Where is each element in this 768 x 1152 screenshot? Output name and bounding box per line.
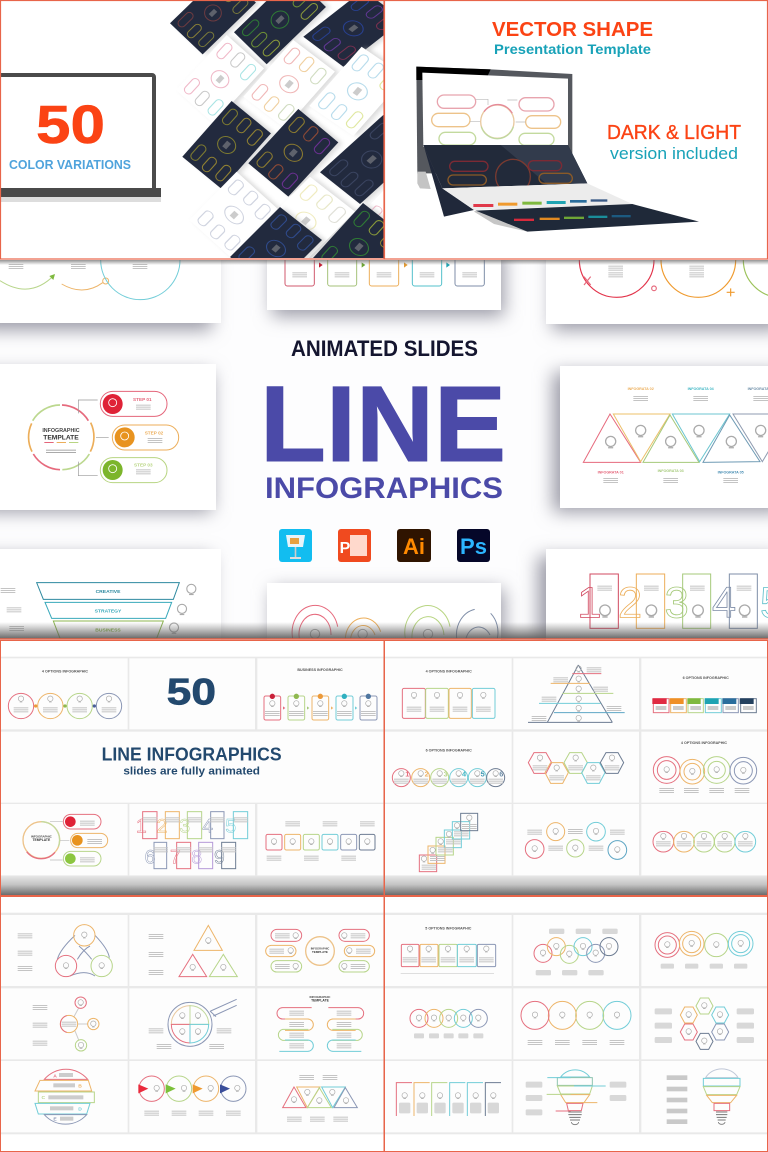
slide: 6 options tabs [652, 676, 756, 713]
slide: six pills around circle: TEMPLATE [312, 950, 328, 954]
slide: light bulb with arrows [526, 1070, 626, 1125]
slide cards: diagonal color variation thumbnails [170, 1, 384, 258]
slide: numbered 1 to 9: 5 [225, 817, 236, 838]
card: step list infographic: INFOGRAPHIC [42, 428, 80, 434]
subheading: version included: version included [610, 144, 738, 163]
panel: main cover [0, 260, 768, 640]
slide: six pills around circle: INFOGRAPHIC [311, 947, 329, 951]
slide: circle bands A to E: E [53, 1117, 57, 1123]
label: color variations: COLOR VARIATIONS [9, 158, 131, 172]
card: top right circles [546, 260, 768, 324]
slide: business infographic: BUSINESS INFOGRAPHIC [297, 668, 343, 672]
card: numbered infographic: 3 [665, 579, 689, 627]
slide: magnifier quadrants [149, 999, 237, 1049]
card: step list infographic: STEP 02 [145, 431, 164, 436]
number: 50: 50 [167, 671, 216, 713]
panel: bulbs and sequence grid [384, 896, 768, 1152]
slide: squares with labels [266, 821, 375, 861]
icon: powerpoint: P [340, 540, 351, 557]
heading: dark and light: DARK & LIGHT [607, 122, 741, 144]
slide: 6 numbered circles: 4 [462, 770, 467, 779]
slide: six flag columns [396, 1083, 501, 1116]
card: top center boxes [267, 260, 501, 310]
card shadows [0, 250, 768, 649]
slide: six pills around circle [266, 929, 375, 972]
slide: infographic template steps: TEMPLATE [32, 838, 51, 842]
slide: 4 options boxes: 4 OPTIONS INFOGRAPHIC [426, 670, 472, 674]
bottom shadow [0, 876, 384, 895]
slide: numbered 1 to 9: 6 [145, 847, 155, 868]
icon: adobe photoshop: Ps [460, 534, 487, 559]
slide: 4 options circles: 4 OPTIONS INFOGRAPHIC [42, 670, 88, 674]
icon: powerpoint [338, 529, 371, 562]
card: numbered infographic: 1 [577, 579, 601, 627]
slide: infographic template steps: INFOGRAPHIC [31, 834, 53, 838]
card: step list infographic: TEMPLATE [43, 434, 79, 441]
slide: 5 options boxes [401, 926, 496, 974]
slide: four circles with flags [138, 1076, 246, 1116]
heading: line infographics: LINE INFOGRAPHICS [102, 744, 282, 765]
laptop [0, 75, 161, 202]
slide: pyramid [528, 665, 625, 722]
slide: infographic template steps [23, 814, 108, 866]
slide: 6 numbered circles: 6 OPTIONS INFOGRAPHIC [426, 748, 472, 752]
card: funnel infographic [0, 549, 221, 640]
slide: light bulb with text list [667, 1069, 740, 1124]
card: numbered infographic [546, 549, 768, 640]
title: infographics: INFOGRAPHICS [265, 472, 503, 505]
slide: four large circles [521, 1001, 631, 1045]
slide: 4 options circles [8, 670, 122, 719]
icon: adobe illustrator [397, 529, 431, 562]
slide: 5 connected circles [653, 831, 756, 852]
slide: 4 options boxes [402, 670, 495, 718]
slide: numbered 1 to 9: 9 [214, 847, 225, 868]
number 50: 50 [36, 95, 105, 155]
slide: circle bands A to E: C [42, 1095, 46, 1101]
slide: 4 option spirals: 4 OPTIONS INFOGRAPHIC [681, 741, 727, 745]
slide: template mirrored pills: TEMPLATE [311, 999, 330, 1003]
slide: 6 numbered circles: 1 [405, 770, 409, 779]
card: triangles infographic: INFOGRATA 05 [718, 470, 744, 474]
card: numbered infographic: 4 [712, 579, 736, 627]
slide: three triangles [149, 925, 237, 977]
panel: vector shape presentation template [384, 0, 768, 259]
slide: 4 option spirals [653, 741, 757, 793]
card: top left arcs [0, 259, 221, 323]
subheading: presentation template: Presentation Template [494, 41, 651, 57]
slide: circle bands A to E [35, 1069, 94, 1124]
slide: wave circles [525, 822, 627, 859]
slide: numbered 1 to 9: 8 [191, 847, 202, 868]
slide: four spiral circles [655, 931, 753, 969]
slide: three linked circles [18, 925, 112, 977]
slide: stair squares [419, 813, 478, 872]
card: triangles infographic [560, 366, 768, 508]
card: step list infographic: STEP 01 [133, 397, 152, 402]
slide: numbered 1 to 9: 3 [179, 817, 190, 838]
icon: adobe photoshop [457, 529, 490, 562]
panel: 50 line infographics grid [0, 640, 384, 896]
slide: template mirrored pills: INFOGRAPHIC [310, 995, 331, 999]
card: step list infographic: STEP 03 [134, 462, 153, 467]
slide: circle bands A to E: B [78, 1084, 82, 1090]
slide: numbered 1 to 9: 7 [170, 847, 181, 868]
panel: 50 color variations [1, 1, 384, 258]
panel: shapes grid [0, 896, 384, 1152]
slide: circle bands A to E: A [53, 1073, 57, 1079]
card: triangles infographic: INFOGRATA 02 [628, 387, 654, 391]
monitor with slides [416, 67, 699, 232]
card: bottom center spirals [267, 583, 501, 640]
bottom shadow [384, 876, 768, 895]
slide: numbered 1 to 9: 4 [202, 817, 213, 838]
card: numbered infographic: 2 [618, 579, 642, 627]
subheading: slides are fully animated: slides are fully animated [123, 765, 260, 777]
panel: options grid [384, 640, 768, 896]
slide: hexagon ring [655, 998, 754, 1049]
card: triangles infographic: INFOGRATA 03 [658, 469, 684, 473]
card: funnel infographic: CREATIVE [96, 589, 121, 595]
slide: zigzag circles [534, 929, 618, 975]
slide: 5 options boxes: 5 OPTIONS INFOGRAPHIC [425, 926, 472, 930]
slide: template mirrored pills [277, 995, 364, 1051]
slide: 6 numbered circles [392, 748, 505, 787]
icon: keynote [279, 529, 312, 562]
slide: 6 options tabs: 6 OPTIONS INFOGRAPHIC [683, 676, 729, 680]
slide: hexagon chain [528, 753, 624, 783]
heading: vector shape: VECTOR SHAPE [492, 19, 653, 41]
icon: adobe illustrator: Ai [403, 534, 425, 559]
card: funnel infographic: STRATEGY [95, 608, 122, 614]
title: line: LINE [260, 363, 506, 484]
slide: numbered 1 to 9: 1 [136, 817, 147, 838]
slide: 6 numbered circles: 3 [444, 770, 448, 779]
slide: hub and spokes [33, 997, 99, 1051]
slide: five overlapping circles [410, 1009, 487, 1038]
card: funnel infographic: BUSINESS [95, 628, 121, 634]
slide: 6 numbered circles: 5 [481, 770, 485, 779]
slide: triangle row [283, 1075, 357, 1122]
slide: business infographic [264, 668, 377, 720]
slide: 6 numbered circles: 2 [425, 770, 429, 779]
card: step list infographic [0, 364, 216, 510]
card: triangles infographic: INFOGRATA 01 [598, 470, 624, 474]
title: animated slides: ANIMATED SLIDES [291, 336, 478, 361]
card: triangles infographic: INFOGRATA 04 [688, 387, 715, 391]
slide: numbered 1 to 9: 2 [157, 817, 167, 838]
slide: circle bands A to E: D [78, 1107, 82, 1113]
slide: 6 numbered circles: 6 [499, 770, 503, 779]
slide: numbered 1 to 9 [136, 812, 248, 869]
